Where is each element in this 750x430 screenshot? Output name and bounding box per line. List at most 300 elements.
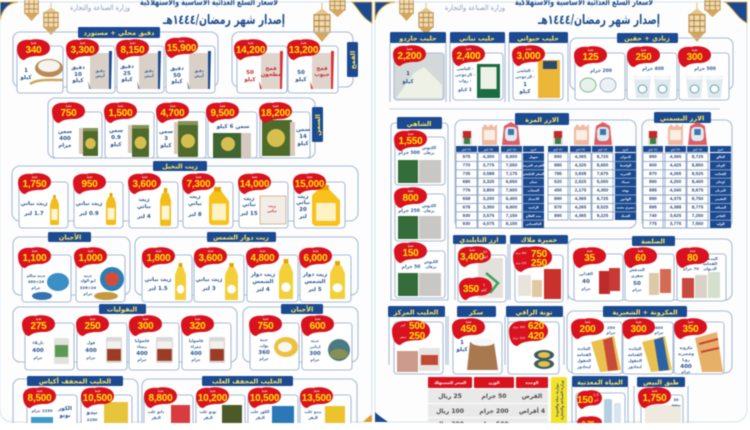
card: tea 250 g [394,187,445,241]
card: sugar: 1 [460,340,464,346]
card: condensed milk: 250 [409,331,426,342]
card: mineral water [576,390,625,430]
card: japanese cheese: جرام [310,357,320,362]
tab: yeast: خميرة ملاك [521,236,558,244]
card: mineral water: لتر [593,398,598,402]
price table: mazza rice 1: 7,550 [506,162,518,167]
card: vermicelli: فقط [688,320,694,324]
tab: basmati rice: الارز البسمتي [660,114,704,122]
card: palm oil 15 L: زيت [243,196,255,202]
card: yeast: 750 [531,249,548,260]
card: anchor bag: فقط [37,389,43,393]
card: palm oil 1.7 L: زيت نباتي [21,201,47,207]
card: abu alwalad cheese: 1,000 [78,253,103,264]
card: vermicelli: وشعيرية [678,351,695,356]
price table: basmati rice: 895 [649,204,657,209]
card: ghee 3 kg: سمن [159,129,173,135]
table header [428,377,548,388]
price table: basmati rice: 8,525 [692,171,704,176]
card: flour 10 kg: دقيق [71,65,85,71]
card: flour 10 kg: أبيض [95,73,105,78]
card: palm oil 0.9 L: 0.9 لتر [78,211,99,217]
price table: mazza rice 2: 8,650 [597,162,609,167]
ministry calligraphy: وزارة الصناعة والتجارة [445,4,505,12]
card: yeast: 450 جرام [516,251,527,255]
card: tea 250 g: الكبوس [422,203,436,208]
card: ghee 0.9 kg: 0.9 [111,135,121,141]
card: tomato 40 g: 35 [584,253,595,264]
card: yogurt 200 g: فقط [588,48,594,52]
card: sunflower 4 L: 4 لتر [255,287,270,293]
price table: mazza rice 1: 3,300 [483,204,495,209]
card: buck cheese: جبنة [260,337,268,342]
tab: gardo milk: حليب جاردو [398,34,437,42]
card: tuna: 100 جرام [513,336,525,341]
tab: palm oil: زيت النخيل [162,162,198,170]
card: egg tray: 30 [673,397,679,402]
card: tomato 70 g: 70 جرام [683,266,699,271]
card: white beans: فقط [143,317,149,321]
tab: egg tray: طبق البيض [643,378,679,386]
card: sugar: كيلو [455,346,468,353]
card: flour 10 kg: كيلو [71,77,84,84]
card: whole wheat [287,39,338,93]
card: nido tin: فقط [314,389,320,393]
card: egg tray [638,387,683,430]
card: sugar: فقط [466,320,472,324]
card: ghee 3 kg: فقط [170,104,176,108]
card: yogurt 400 g [627,46,677,100]
card: vegetable oil 1.5 L: فقط [156,249,162,253]
table row 1: القرص [522,393,542,400]
tab: pasta: المكرونة + الشعيرية [612,308,678,316]
tab: cheese: الأجبان [291,304,313,314]
card: palm oil 15 L: نباتي [242,202,256,208]
card: palm oil 15 L [238,173,288,228]
card: palm oil 8 L [182,173,233,228]
card: palm oil 15 L: زيت [268,203,276,208]
card: anchor bag: 2250 جرام [31,408,53,413]
price table: mazza rice 1: 8,150 [506,221,518,226]
card: palm oil 8 L: فقط [196,175,202,179]
card: whole wheat: 13,200 [289,45,319,56]
card: animal milk [512,45,563,100]
card: pasta 250 g [571,318,622,374]
card: thai rice: 350 [463,284,480,295]
card: ghee 400 g: سمن [58,129,72,135]
price table: mazza rice 2: 520 [554,179,562,184]
card: buck cheese: 360 [258,350,270,356]
card: anchor tin: فقط [262,389,268,393]
card: ghee 14 kg: 18,200 [261,108,291,119]
card: tuna: 160 جرام [513,325,525,330]
card: nono tin: فقط [210,389,216,393]
panel: palm oil [12,161,358,228]
price table: basmati rice: 3,775 [670,221,682,226]
price table: basmati rice: 8,750 [692,196,704,201]
panel: cheese 2 [243,304,358,370]
table row 2 [428,404,548,417]
price table: mazza rice 1: 3,588 [483,171,495,176]
tab: mazza rice: الارز المزة [525,116,559,124]
price table: mazza rice 1: 7,150 [506,213,518,218]
card: tomato 50 g [624,247,674,301]
card: pasta 400 g: جرام [654,330,664,335]
card: pasta 400 g: فقط [636,320,642,324]
price table: mazza rice 1: 4,075 [483,221,495,226]
card: animal milk: - العاصي [517,68,534,73]
card: whole wheat: قمح [316,66,328,72]
tab: tea [397,117,442,129]
card: palm oil 15 L: فقط [252,175,258,179]
price table: mazza rice 2: 01 كيلو [552,147,563,151]
header: left page [70,0,285,28]
card: sunflower 5 L: زيت دوار [302,272,327,278]
price table: basmati rice: 3,625 [670,213,682,218]
price table: basmati rice: 740 [649,213,657,218]
card: ghee 400 g: فقط [66,104,72,108]
card: dano tin [144,387,193,430]
price table: mazza rice 2: 4,350 [597,188,609,193]
card: peas: فقط [36,317,42,321]
card: palm oil 1.7 L: 1,750 [22,179,47,190]
card: pasta 400 g: ليجادور [627,364,642,369]
card: peas [22,315,74,370]
card: flour 25 kg: فقط [130,41,136,45]
price table: mazza rice 1: الراعية [528,205,539,209]
card: animal milk: - الرجوحي [515,74,535,79]
card: ghee 0.9 kg: 1,500 [108,108,133,119]
card: sunflower 5 L [299,247,351,302]
price table: basmati rice: 01 كيلو [648,147,658,151]
price table: mazza rice 1: 735 [463,171,471,176]
card: flour 1 kg: 340 [25,45,42,56]
card: nido bag: نيدو [86,410,97,416]
card: ghee 14 kg: 14 [299,134,307,140]
card: palm oil 0.9 L: زيت نباتي [76,201,102,207]
card: flour 10 kg [66,39,115,93]
card: palm oil 4 L: نباتي [137,204,151,210]
price table: mazza rice 2: الهامور [619,197,631,201]
card: peas: 400 [32,348,44,354]
card: salem cheese [18,247,71,302]
card: peas: جرام [33,355,43,360]
tab: vegetable milk: حليب نباتي [459,34,495,42]
table row 3: 200 ريال [436,421,464,428]
price table: basmati rice: 8,725 [692,154,704,159]
price table: mazza rice 2: 4,365 [575,213,587,218]
card: tea 250 g: فقط [408,189,414,193]
corner ornament: left page top left [0,2,18,20]
tab: bagged powdered milk: الحليب المجفف أكياس [39,376,111,386]
card: palm oil 0.9 L [73,173,123,228]
card: ghee 400 g: 400 [59,136,71,142]
card: gardo milk: فقط [407,47,413,51]
price table: mazza rice 1: 8,600 [506,154,518,159]
card: flour 50 kg: كيلو [170,78,183,85]
card: fava beans: جرام [86,355,96,360]
card: vermicelli: روبا [682,357,690,362]
panel: legumes [13,304,237,370]
price table: mazza rice 1: 7,175 [506,171,518,176]
tab: thai rice: ارز التايلندي [459,236,499,244]
card: palm oil 20 L: لتر [298,214,307,220]
price table: mazza rice 2: الواسط [620,163,631,167]
price table: mazza rice 2: 9,225 [597,213,609,218]
card: palm oil 20 L: زيت [297,194,309,200]
card: tomato 50 g: جرام [632,287,642,292]
card: egg tray: فقط [652,389,658,393]
card: ghee 14 kg: فقط [273,104,279,108]
price table: mazza rice 2: 7,675 [597,171,609,176]
card: flour 1 kg: كيلو [19,74,32,81]
card: pasta 250 g: ليجادور [576,364,591,369]
card: palm oil 20 L: 20 [299,207,307,213]
price table: basmati rice: الوليد [716,222,725,226]
price table: mazza rice 1: 3,575 [483,213,495,218]
card: salem cheese: جبنة سالم [26,273,46,278]
price table: mazza rice 1: 05 كيلو [483,147,493,151]
card: animal milk: 1 [523,82,527,88]
card: tomato 40 g: الفداين [579,271,593,276]
card: vermicelli: مكرونة [679,345,693,350]
card: mineral water: 0.75 [582,421,595,428]
card: sunflower 5 L: الشمس [304,279,326,285]
card: tomato 70 g: فقط [690,249,696,253]
card: whole wheat: حبوب [314,72,330,78]
price table: mazza rice 2: السبك [621,214,630,218]
card: palm oil 1.7 L [18,173,68,228]
card: palm oil 4 L: زيت [138,197,150,203]
card: flour 10 kg: 10 [74,72,82,78]
panel: tomato paste [568,236,732,301]
card: palm oil 8 L: 7,300 [186,179,211,190]
card: vermicelli [674,318,724,374]
card: flour 25 kg: أبيض [144,73,154,78]
panel: tea [391,117,448,300]
price table: basmati rice: العقيبي [715,197,726,201]
card: anchor bag [23,387,77,430]
price table: basmati rice: 4,265 [670,171,682,176]
price table: basmati rice: 10 كيلو [692,147,702,151]
card: pasta 400 g: المائدة [629,346,641,351]
card: salem cheese: 1,100 [22,253,47,264]
card: palm oil 8 L: زيت [189,194,201,200]
price table: basmati rice: الضيافة [715,205,726,209]
card: ghee 6 kg: فقط [220,104,226,108]
card: flour 50 kg: 15,900 [167,43,197,54]
card: vermicelli: جرام [681,369,691,374]
panel: flour [13,27,218,93]
card: sunflower 4 L: زيت دوار [250,272,275,278]
card: sunflower 5 L: 5 لتر [307,287,322,293]
card: japanese cheese: فقط [315,317,321,321]
panel: tinned powdered milk [142,376,357,430]
card: palm oil 15 L: 14,000 [240,179,270,190]
card: tea 50 g: فقط [408,244,414,248]
card: white beans: 300 [137,321,154,332]
card: pasta 400 g: الحقول [628,358,642,363]
card: egg tray: بيضة [671,402,681,407]
tab: condensed milk: الحليب المركز [393,308,438,316]
card: yogurt 500 g: فقط [692,48,698,52]
card: palm oil 8 L: 8 لتر [187,212,202,218]
card: tea 50 g: 150 [402,248,419,259]
corner ornament: left page bottom right [363,415,372,422]
card: thai rice [458,246,506,302]
card: abu alwalad cheese: جرام [83,291,93,296]
card: pasta 250 g: 200 [579,324,596,335]
tab: tuna: تونة الراقي [516,308,552,316]
tab: flour: دقيق محلي + مستورد [84,29,155,37]
card: ghee 3 kg: 3 [164,136,168,142]
price table: basmati rice: الوبان [716,163,725,167]
price table: mazza rice 2: 5,050 [597,179,609,184]
card: nido bag [81,387,132,430]
price table: mazza rice 2: بهجة [622,189,629,193]
card: flour 25 kg: دقيق [144,68,154,73]
card: tea 50 g: 50 جرام [402,264,420,270]
card: tomato 70 g [676,247,726,301]
card: fava beans: 400 [85,348,97,354]
price table: basmati rice: 900 [649,162,657,167]
card: palm oil 15 L: نباتي [267,208,277,213]
card: tea 500 g: الكبوس [422,145,436,150]
card: nido tin: البقر [307,415,318,420]
card: fava beans: فول [87,340,96,345]
price table: mazza rice 2: الخيرية [620,172,631,176]
card: ghee 0.9 kg [104,102,154,158]
card: vermicelli: 350 [682,324,699,335]
card: flour 50 kg: دقيق [194,68,204,73]
corner ornament: left page top right [352,2,372,23]
price table: mazza rice 1: بنت الفلاح [526,214,541,218]
card: ghee 14 kg: سمن [296,127,310,133]
card: dano tin: فقط [158,389,164,393]
card: buck cheese: 750 [257,321,274,332]
card: tuna: 620 [528,321,545,332]
card: ghee 0.9 kg: كيلو [109,141,122,148]
card: tea 50 g [394,242,445,298]
card: red beans [181,315,231,370]
card: tomato 50 g: 60 [635,253,646,264]
card: vegetable oil 1.5 L: زيت نباتي [145,277,171,283]
card: salem cheese: جرام [31,285,41,290]
card: tea 500 g [394,130,445,185]
card: ground wheat: مطحون [261,72,281,78]
card: vegetable milk: فقط [466,47,472,51]
card: fava beans: 250 [84,321,101,332]
price table: mazza rice 2: 10 كيلو [597,147,607,151]
card: ghee 3 kg: 4,700 [160,108,185,119]
card: nido tin: نيدو علب [304,409,322,414]
card: anchor bag: 8,500 [27,393,52,404]
price table: mazza rice 1: 7,600 [506,188,518,193]
price table: mazza rice 2: 05 كيلو [575,147,585,151]
card: abu alwalad cheese: جبنة [84,273,92,278]
tab: sunflower oil: زيت دوار الشمس [213,234,269,242]
price table: mazza rice 2: الديوان [620,155,631,159]
card: thai rice: كيلو [481,255,488,259]
price table: mazza rice 2: مصري محمد [616,205,635,209]
card: nono tin: نونو علب [199,409,217,414]
ministry calligraphy: وزارة الصناعة والتجارة [70,4,130,12]
table row 2: 100 ريال [436,408,464,415]
corner ornament: right page bottom left [375,412,388,422]
tab: wheat: القمح [349,51,357,69]
card: sunflower 5 L: 6,000 [303,253,328,264]
yellow note strip: موازنة مياه والجودة [555,383,559,417]
card: thai rice: فقط [469,248,475,252]
card: yogurt 500 g [678,46,729,100]
card: tomato 40 g: 40 [582,279,590,285]
card: buck cheese: فقط [263,317,269,321]
price table: mazza rice 1: 770 [463,162,471,167]
card: sunflower 4 L [246,247,298,302]
table row 1 [428,389,548,403]
card: anchor bag: الكور [57,405,72,412]
card: ghee 0.9 kg: فقط [118,104,124,108]
card: thai rice: 1 [483,283,485,287]
card: animal milk: كيلو [518,88,531,95]
panel: pasta and vermicelli [567,306,732,374]
price table: mazza rice 1: 6,600 [506,204,518,209]
card: buck cheese: بوليد [260,343,269,348]
card: japanese cheese: جبنة [311,338,319,343]
yellow note strip: وزارة الصناعة والتجارة [560,380,564,420]
card: ghee 0.9 kg: سمن [109,128,123,134]
price table: mazza rice 2: 4,365 [575,154,587,159]
card: vegetable milk: - العاصي [457,66,474,71]
card: nido bag: 2250 [87,417,98,422]
card: tomato 40 g [573,247,623,301]
card: tomato 50 g: 50 [633,281,641,287]
card: mineral water: 150 [577,395,594,406]
card: sugar [452,318,502,374]
card: flour 50 kg: 50 [173,73,181,79]
price table: mazza rice 1: 930 [463,213,471,218]
card: palm oil 1.7 L: 1.7 لتر [23,211,44,217]
panel: mineral water [572,376,628,430]
card: red beans: فقط [195,317,201,321]
card: vegetable milk: 1 كيلو [457,87,472,93]
card: yogurt 500 g: 500 جرام [694,66,716,72]
price table: mazza rice 1: السحاب [528,189,539,193]
panel: animal milk [509,32,568,102]
card: yogurt 400 g: فقط [641,48,647,52]
yellow note strip [551,377,567,427]
table row 2: 200 جرام [479,408,509,415]
card: abu alwalad cheese: ابو الولد [80,278,96,283]
card: animal milk: فقط [526,47,532,51]
card: palm oil 20 L: نباتي [296,200,310,206]
title line 2: إصدار شهر رمضان/١٤٤٤هـ [537,13,660,28]
card: pasta 400 g: الفخامة [628,352,642,357]
price table: mazza rice 1: 6,400 [506,196,518,201]
card: tea 250 g: 800 [402,193,419,204]
price table: basmati rice: العربان [715,189,726,193]
price table: mazza rice 1: 10 كيلو [506,147,516,151]
card: gardo milk: كيلو [401,78,414,85]
card: nido tin: 13,500 [302,393,332,404]
card: tea 500 g: برهان [423,150,435,155]
lanterns: left page [25,0,345,42]
card: buck cheese: جرام [259,356,269,361]
corner ornament: right page top left [375,2,395,20]
price table: mazza rice 1: 776 [463,188,471,193]
card: nono tin: 10,200 [198,393,228,404]
price table: mazza rice 2: 8,525 [597,204,609,209]
